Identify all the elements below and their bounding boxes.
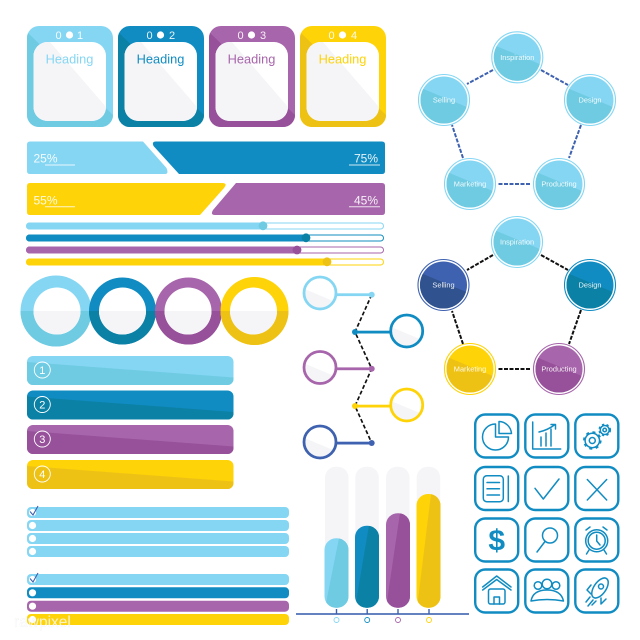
slider yellow xyxy=(26,257,384,266)
node Producting xyxy=(532,158,586,210)
chart axis xyxy=(296,609,469,622)
list bar 1: 1 xyxy=(39,365,45,377)
timeline node 5 xyxy=(302,426,375,460)
chart tracks xyxy=(325,467,440,608)
panel: slider progress bars xyxy=(26,221,384,266)
node Selling xyxy=(418,74,470,126)
bar purple xyxy=(386,513,410,608)
node Design xyxy=(564,259,616,311)
icon: magnifier xyxy=(525,518,568,562)
ring light blue xyxy=(20,276,92,346)
panel: bar chart xyxy=(296,467,469,622)
split bar 55%: 55% xyxy=(34,194,58,208)
panel: linked rings xyxy=(20,276,288,346)
node Inspiration: Inspiration xyxy=(500,53,534,62)
node Design xyxy=(564,74,616,126)
node Design: Design xyxy=(578,280,602,290)
checklist row 3 xyxy=(27,533,289,544)
card 04: Heading xyxy=(319,52,366,66)
coloured row purple xyxy=(27,601,289,612)
checklist row checked xyxy=(27,506,289,518)
icon: cross xyxy=(575,467,618,510)
node Inspiration: Inspiration xyxy=(500,238,534,246)
icon: gears xyxy=(575,414,618,458)
node Inspiration xyxy=(491,31,544,84)
node Inspiration xyxy=(490,216,543,268)
node Producting xyxy=(532,343,586,395)
panel: numbered heading cards xyxy=(27,26,386,127)
node Marketing: Marketing xyxy=(454,364,486,374)
node Marketing: Marketing xyxy=(454,180,486,188)
dashed connectors xyxy=(452,255,581,369)
card 01: 0 xyxy=(55,30,62,42)
panel: percentage split bars xyxy=(27,142,385,215)
coloured row checked xyxy=(27,573,289,585)
card 04: 0 xyxy=(328,30,335,42)
panel: cycle diagram coloured xyxy=(414,216,620,399)
node Producting: Producting xyxy=(541,364,577,374)
list bar 4 xyxy=(27,460,234,489)
icon: dollar xyxy=(475,518,518,562)
list bar 2 xyxy=(27,390,234,420)
slider purple xyxy=(26,246,384,254)
split bar 25%: 25% xyxy=(34,152,58,166)
dashed zigzag path xyxy=(355,295,372,443)
card 04: 4 xyxy=(351,30,357,42)
watermark: rawpixel xyxy=(14,614,71,631)
slider light blue xyxy=(26,221,384,230)
card 02: Heading xyxy=(137,52,184,66)
split bar 25% xyxy=(27,142,167,174)
node Producting: Producting xyxy=(541,180,577,188)
card 04 xyxy=(300,26,386,127)
card 01: 1 xyxy=(77,30,83,42)
checklist row 2 xyxy=(27,520,289,531)
card 01: Heading xyxy=(46,52,93,66)
panel: icon grid xyxy=(475,414,618,612)
split bar 45% xyxy=(212,183,385,215)
list bar 4: 4 xyxy=(39,469,45,481)
card 01 xyxy=(27,26,113,127)
split bar 75%: 75% xyxy=(354,152,378,166)
list bar 3 xyxy=(27,425,234,454)
slider blue xyxy=(26,233,384,242)
dashed connectors xyxy=(452,70,581,184)
card 03: 0 xyxy=(237,30,244,42)
ring blue xyxy=(89,278,156,344)
card 03: Heading xyxy=(228,52,275,66)
card 03: 3 xyxy=(260,30,266,42)
panel: checklist light blue xyxy=(27,506,289,557)
coloured row blue xyxy=(27,587,289,598)
list bar 3: 3 xyxy=(39,434,45,446)
node Marketing xyxy=(444,158,496,210)
list bar 1 xyxy=(27,356,234,385)
node Design: Design xyxy=(578,96,602,104)
node Selling: Selling xyxy=(433,96,455,104)
icon: rocket xyxy=(575,570,618,612)
split bar 55% xyxy=(27,183,226,215)
ring yellow xyxy=(220,277,288,345)
node Selling xyxy=(417,259,470,311)
bar blue xyxy=(355,525,379,608)
icon: alarm clock xyxy=(575,518,618,562)
icon: check mark xyxy=(525,467,568,510)
card 02: 2 xyxy=(169,30,175,42)
list bar 2: 2 xyxy=(39,400,45,412)
node Selling: Selling xyxy=(432,280,455,290)
icon: people xyxy=(525,570,568,612)
card 02: 0 xyxy=(146,30,153,42)
timeline node 3 xyxy=(302,352,375,386)
bar yellow xyxy=(416,494,441,608)
icon: pie chart xyxy=(475,414,518,458)
card 03 xyxy=(209,26,295,127)
checklist row 4 xyxy=(27,546,289,557)
icon: house xyxy=(475,570,518,612)
timeline node 4 xyxy=(352,389,425,423)
icon: document xyxy=(475,467,518,510)
icon: growth chart xyxy=(525,414,568,458)
split bar 45%: 45% xyxy=(354,194,378,208)
panel: checklist multicolour xyxy=(27,573,289,625)
panel: numbered list bars xyxy=(27,356,234,489)
bar light blue xyxy=(324,538,349,608)
ring purple xyxy=(155,278,222,344)
timeline node 1 xyxy=(302,277,375,311)
card 02 xyxy=(118,26,204,127)
split bar 75% xyxy=(153,142,385,174)
coloured row yellow xyxy=(27,614,289,625)
panel: cycle diagram light xyxy=(414,32,620,214)
node Marketing xyxy=(444,343,496,395)
panel: zigzag timeline xyxy=(302,277,425,460)
timeline node 2 xyxy=(352,315,425,349)
icon: dollar: $ xyxy=(488,524,505,558)
